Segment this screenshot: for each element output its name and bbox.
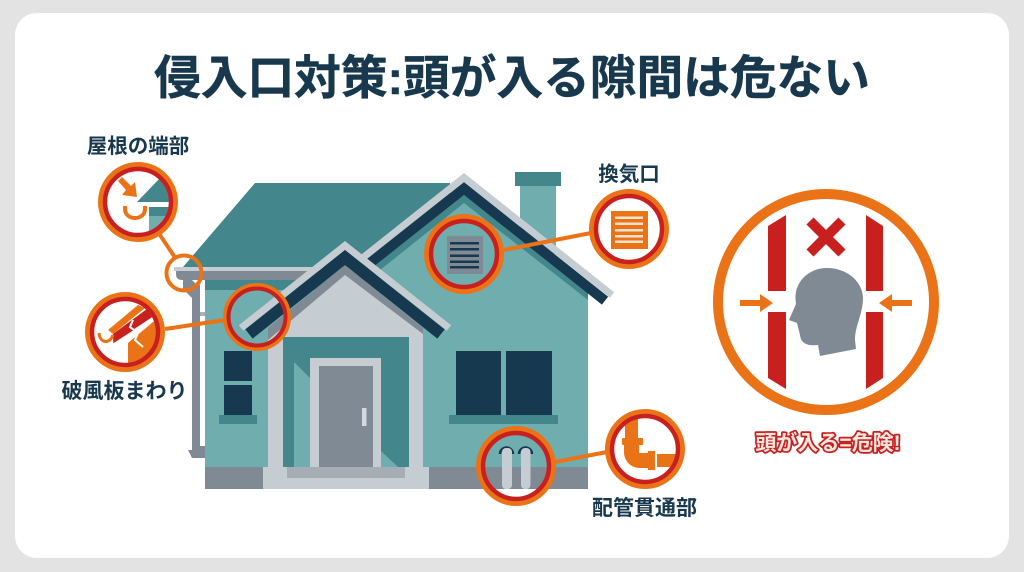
callout: pipe penetration (478, 412, 697, 520)
callout: vent: 換気口 (598, 163, 660, 186)
callout: vent (426, 163, 666, 292)
title: 侵入口対策:頭が入る隙間は危ない (154, 52, 870, 104)
callout: pipe penetration: 配管貫通部 (592, 497, 697, 520)
house illustration (174, 172, 612, 489)
callout: roof edge (87, 135, 202, 290)
callout: bargeboard: 破風板まわり (62, 380, 188, 403)
magnifier ring: bargeboard (225, 285, 289, 349)
warning caption: 頭が入る=危険! (755, 431, 901, 455)
callout: roof edge: 屋根の端部 (87, 135, 189, 158)
callout: bargeboard (62, 294, 225, 403)
warning diagram: head in gap (718, 194, 934, 410)
